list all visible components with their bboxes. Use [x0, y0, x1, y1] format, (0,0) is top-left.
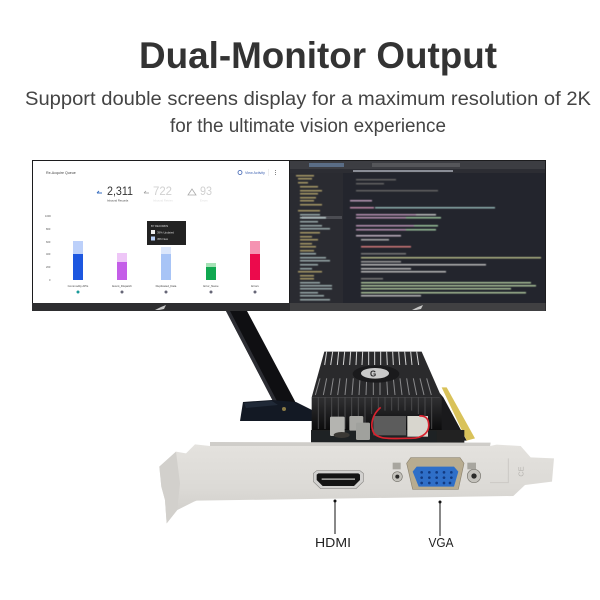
- monitor bottom bezel with logo: [32, 303, 546, 311]
- HDMI pointer line: [334, 500, 336, 534]
- code lines: [350, 179, 541, 296]
- heatsink: G: [370, 370, 376, 379]
- HDMI port: [313, 471, 363, 489]
- subtitle: [25, 88, 591, 137]
- VGA pointer line: [438, 500, 442, 536]
- subtitle: for the ultimate vision experience: [170, 115, 446, 137]
- graphics card: [159, 352, 554, 523]
- left screen: dashboard: Inbound Records: [107, 198, 129, 202]
- dual monitor: [32, 160, 546, 311]
- tooltip: BY RECORDS: [151, 224, 168, 228]
- tooltip: 39% Updated: [157, 230, 174, 234]
- VGA port: [407, 458, 464, 489]
- monitor frame: [32, 160, 546, 311]
- bar chart: Commodity APIs: [68, 284, 89, 288]
- left screen: dashboard: Errors: [200, 198, 208, 202]
- metal bracket: CE: [516, 466, 525, 477]
- circuit board: [311, 430, 464, 443]
- bar chart: 0: [49, 278, 51, 282]
- VGA screw right: [467, 463, 481, 483]
- bar chart: Errors: [251, 284, 259, 288]
- right screen: code editor: [290, 161, 545, 303]
- left screen: dashboard: View Activity: [245, 171, 265, 175]
- bar chart: Error_Name: [203, 284, 219, 288]
- left screen: dashboard: 722: [153, 186, 172, 198]
- heatsink: [312, 352, 442, 430]
- left screen: dashboard: [33, 161, 289, 303]
- left screen: dashboard: Re-Acquire Queue: [46, 171, 76, 175]
- bar chart: 600: [46, 240, 51, 244]
- bar chart: Event_Dispatch: [112, 284, 132, 288]
- left screen: dashboard: Inbound Retries: [153, 198, 173, 202]
- tooltip: [147, 221, 186, 245]
- VGA label: VGA: [428, 535, 454, 550]
- bar chart: 200: [46, 265, 51, 269]
- bar chart: 800: [46, 227, 51, 231]
- tooltip: 456 New: [157, 237, 169, 241]
- gold edge connector: [442, 387, 475, 441]
- bar chart: Duplicated_Data: [156, 284, 177, 288]
- monitor stand: [226, 311, 312, 421]
- title: Dual-Monitor Output: [139, 35, 497, 76]
- left screen: dashboard: 2,311: [107, 186, 133, 198]
- VGA screw left: [392, 463, 402, 482]
- HDMI label: HDMI: [315, 535, 351, 550]
- left screen: dashboard: 93: [200, 186, 212, 198]
- bar chart: 400: [46, 252, 51, 256]
- metal bracket: [159, 442, 554, 523]
- bar chart: 1000: [45, 214, 51, 218]
- bar chart: [45, 214, 260, 294]
- components: capacitors and wire: [311, 407, 437, 442]
- file tree: [296, 175, 332, 300]
- subtitle: Support double screens display for a maximum resolution of 2K: [25, 88, 591, 110]
